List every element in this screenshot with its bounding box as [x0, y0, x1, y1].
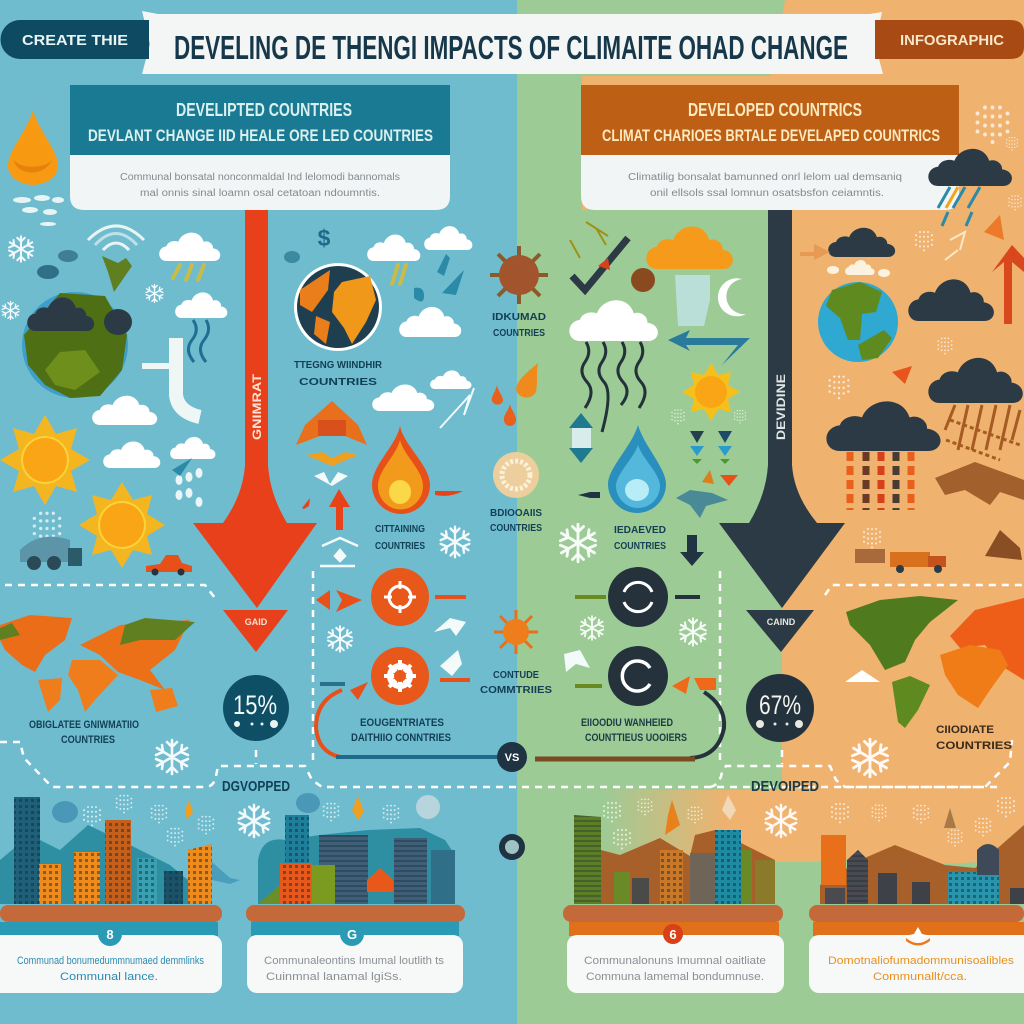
icon: orange sun center [494, 610, 538, 654]
icon: small house [569, 413, 593, 463]
icon: pale rain block [675, 275, 710, 326]
icon: blue drop [608, 425, 666, 513]
city scene 4 [809, 797, 1024, 993]
icon: debris truck [20, 512, 82, 570]
label: developed right: DEVOIPED [751, 778, 819, 795]
icon: orange car [146, 555, 192, 576]
label: left map: OBIGLATEE GNIWMATIIO [29, 719, 139, 731]
icon: orange globe [294, 263, 382, 351]
icon: brown hatch rain [945, 405, 1020, 460]
city scene 1: Communal lance. [60, 971, 158, 983]
icon: white dashes [13, 195, 64, 226]
icon: small flames and lightning [440, 363, 538, 428]
label: center left top [294, 360, 383, 388]
dashed connector [0, 566, 1024, 787]
map: left world [0, 615, 195, 712]
icon: brown mound [935, 462, 1024, 560]
icon: sun center right [682, 363, 740, 421]
label: center lower: COMMTRIIES [480, 685, 552, 696]
label: center left top: COUNTRIES [299, 377, 377, 388]
dark arrow: DEVIDINE [774, 374, 788, 440]
label: right lower: COUNTTIEUS UOOIERS [585, 732, 687, 744]
panel: left header: DEVLANT CHANGE IID HEALE ORE LED COUNTRIES [88, 126, 433, 145]
icon: orange house [296, 401, 367, 486]
panel: right header: onil ellsols ssal lomnun osatsbsfon ceiamntis. [650, 188, 884, 199]
tag: infographic: INFOGRAPHIC [900, 32, 1004, 49]
label: left map [29, 719, 139, 746]
icon: brown sun center [490, 246, 548, 304]
icon: white pipe [142, 338, 200, 417]
tag: create the: CREATE THIE [22, 32, 128, 49]
stat: 67 percent [746, 674, 814, 742]
stat: 15 percent [223, 675, 289, 741]
label: center left lower: DAITHIIO CONNTRIES [351, 732, 451, 744]
icon: small arrows [316, 590, 470, 700]
badge: versus: VS [505, 752, 519, 764]
label: center lower: CONTUDE [493, 670, 539, 681]
label: center left top: TTEGNG WIINDHIR [294, 360, 383, 371]
icon: sun left bottom [79, 482, 165, 568]
label: center middle [490, 508, 542, 534]
icon: snowflake city right [766, 805, 796, 837]
icon: snowflakes [2, 236, 163, 319]
icon: snowflake right [852, 739, 888, 777]
tag: create the [1, 20, 149, 59]
icon: snowflakes center left [328, 527, 469, 652]
title ribbon [142, 11, 883, 74]
panel: left header: DEVELIPTED COUNTRIES [176, 100, 352, 120]
icon: snowflakes center right [560, 524, 706, 646]
icon: colored triangles [676, 431, 738, 518]
icon: wifi arcs [88, 226, 144, 250]
icon: earth right [818, 282, 898, 362]
icon: dollar: $ [318, 225, 331, 251]
icon: blue streaks [414, 254, 464, 302]
badge: versus [497, 742, 527, 772]
snow patches 1 [52, 795, 214, 846]
icon: blue arrow [668, 330, 750, 365]
icon: black circle one [608, 567, 668, 627]
city scene 1: 8 [106, 927, 114, 942]
label: center top: IDKUMAD [492, 312, 546, 323]
icon: snowflake large left [156, 740, 188, 774]
label: center left lower: EOUGENTRIATES [360, 717, 444, 729]
panel: left header [70, 85, 450, 210]
curved connector left [316, 690, 500, 757]
icon: red up arrow right [992, 245, 1024, 324]
icon: globe with dark cloud [22, 292, 132, 398]
panel: left header: Communal bonsatal nonconmaldal Ind lelomodi bannomals [120, 172, 400, 183]
icon: small blue fish [37, 250, 300, 279]
icon: orange sparkle [945, 215, 1004, 260]
icon: moon [718, 278, 746, 316]
icon: blue rain streaks [938, 187, 980, 226]
label: right lower: EIIOODIU WANHEIED [581, 717, 673, 729]
city scene 2: Communaleontins Imumal loutlith ts [264, 955, 445, 967]
stat: 67 percent: 67% [759, 690, 801, 720]
dark arrow [719, 210, 845, 652]
label: right map: CIIODIATE [936, 724, 994, 736]
panel: right header: Climatilig bonsalat bamunned onrl lelom ual demsaniq [628, 172, 902, 183]
snow patches 4 [831, 797, 1018, 860]
clouds: center left [367, 226, 472, 411]
city scene 2: G [347, 927, 357, 942]
curved connector right [535, 692, 724, 759]
stat: 15 percent: 15% [233, 690, 277, 720]
badge: small circle [499, 834, 525, 860]
icon: sun left top [0, 415, 90, 505]
city scene 3: Communalonuns Imumnal oaitliate [584, 955, 766, 967]
label: center middle: COUNTRIES [490, 523, 542, 534]
label: center top: COUNTRIES [493, 328, 545, 339]
label: center left lower [351, 717, 451, 744]
icon: check mark [570, 222, 655, 292]
label: right lower [581, 717, 687, 744]
panel: left header: mal onnis sinal loamn osal cetatoan ndoumntis. [140, 188, 380, 199]
icon: orange cloud [646, 227, 733, 269]
icon: center right small arrows [564, 597, 716, 694]
icon: flame [372, 426, 430, 514]
city scene 2 [246, 793, 465, 993]
city scene 4: Communallt/cca. [873, 971, 967, 983]
icon: white scatter [828, 337, 953, 399]
label: center top [492, 312, 546, 339]
label: left map: COUNTRIES [61, 734, 115, 746]
icon: orange drop [8, 110, 58, 185]
icon: red up arrow [302, 489, 463, 530]
dark clouds: right column [826, 149, 1023, 451]
snow patches 2 [296, 793, 440, 823]
map: right world [845, 596, 1024, 728]
label: center lower [480, 670, 552, 696]
icon: snowflake city left [239, 805, 269, 837]
icon: orange gear circle [371, 647, 429, 705]
dark arrow: CAIND [767, 617, 796, 627]
city scene 4: Domotnaliofumadommunisoalibles [828, 955, 1015, 967]
label: right map: COUNTRIES [936, 740, 1012, 752]
icon: orange trucks [855, 528, 946, 573]
icon: colored rain [850, 452, 911, 510]
city scene 3: Communa lamemal bondumnuse. [586, 971, 764, 983]
icon: small dark arrows [578, 492, 704, 566]
label: center flame: COUNTRIES [375, 541, 425, 552]
label: center right: IEDAEVED [614, 525, 666, 536]
snow patches 3 [603, 795, 736, 849]
icon: yellow rain [173, 265, 406, 284]
red arrow: GNIMRAT [250, 373, 264, 440]
tag: infographic [875, 20, 1024, 59]
red arrow: GAID [245, 617, 268, 627]
label: center flame [375, 524, 425, 552]
city scene 3: 6 [669, 927, 677, 942]
city scene 1 [0, 795, 240, 993]
city scene 1: Communad bonumedummnumaed demmlinks [17, 955, 204, 967]
icon: pale cloud puffs [827, 260, 890, 277]
label: center right [614, 525, 666, 552]
panel: right header: DEVELOPED COUNTRICS [688, 100, 862, 120]
label: right map [936, 724, 1012, 752]
icon: orange side arrow [800, 244, 830, 260]
panel: right header [581, 85, 959, 210]
icon: white specks [915, 106, 1022, 251]
icon: orange target circle [371, 568, 429, 626]
city scene 3 [563, 795, 784, 993]
icon: white patches center right [671, 409, 746, 425]
red arrow [193, 210, 317, 652]
icon: leaf [102, 256, 132, 292]
label: center flame: CITTAINING [375, 524, 425, 535]
icon: white chevron and diamond [320, 538, 358, 566]
label: developed left: DGVOPPED [222, 778, 290, 795]
icon: white cloud center right [569, 300, 658, 341]
city scene 2: Cuinmnal lanamal lgiSs. [266, 971, 402, 983]
icon: black circle two [608, 646, 668, 706]
icon: rain drops [172, 458, 202, 507]
label: center middle: BDIOOAIIS [490, 508, 542, 519]
icon: blue squiggle rain [188, 320, 209, 362]
clouds: left column [92, 233, 227, 468]
icon: cream circle [493, 452, 539, 498]
icon: wavy black rain [582, 342, 645, 432]
label: center right: COUNTRIES [614, 541, 666, 552]
